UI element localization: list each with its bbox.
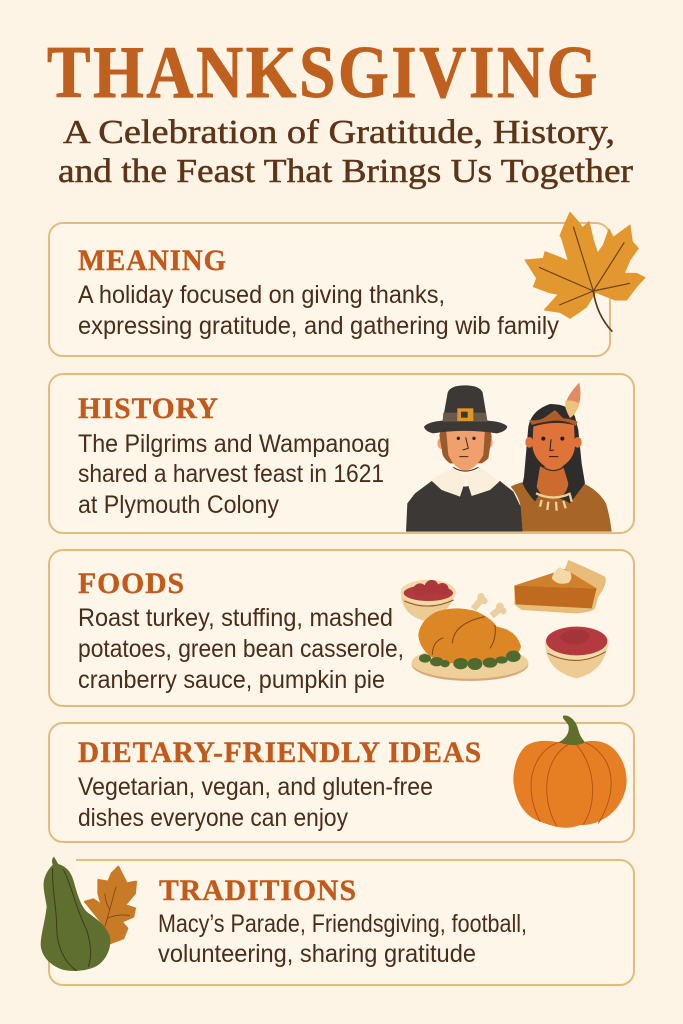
heading: traditions: TRADITIONS <box>159 874 357 907</box>
icon: cranberry bowl right <box>545 626 609 678</box>
icon: pumpkin <box>513 716 627 828</box>
icon: oak leaf <box>85 867 136 943</box>
text: meaning body: A holiday focused on giving thanks, <box>78 281 445 309</box>
text: traditions body: volunteering, sharing gratitude <box>158 940 476 968</box>
heading: dietary-friendly ideas: DIETARY-FRIENDLY IDEAS <box>78 736 482 769</box>
heading: foods: FOODS <box>78 567 185 600</box>
subtitle <box>58 114 634 190</box>
icon: cranberry bowl left <box>401 580 456 621</box>
subtitle: A Celebration of Gratitude, History, <box>63 114 615 151</box>
text: meaning body: expressing gratitude, and gathering wib family <box>78 312 559 340</box>
text: history body <box>78 430 390 519</box>
text: history body: at Plymouth Colony <box>78 491 279 519</box>
icon: green gourd <box>41 857 110 971</box>
text: dietary body <box>78 773 433 832</box>
panel: traditions <box>41 857 634 985</box>
illustration: Wampanoag figure <box>511 383 612 532</box>
panel: dietary-friendly ideas <box>49 716 634 842</box>
icon: maple leaf <box>525 212 645 332</box>
text: history body: The Pilgrims and Wampanoag <box>78 430 390 458</box>
text: history body: shared a harvest feast in 1621 <box>78 460 384 488</box>
text: meaning body <box>78 281 559 340</box>
icon: roast turkey on platter <box>412 593 528 681</box>
panel: meaning <box>49 212 645 356</box>
illustration: Pilgrim figure <box>406 385 523 532</box>
heading: meaning: MEANING <box>78 244 227 277</box>
icon: pumpkin pie slice <box>514 560 606 613</box>
text: foods body: potatoes, green bean casserole, <box>78 635 404 663</box>
text: foods body <box>78 604 404 694</box>
panel: foods <box>49 550 634 706</box>
title: THANKSGIVING <box>47 32 600 114</box>
text: traditions body <box>158 910 527 968</box>
heading: history: HISTORY <box>78 392 219 425</box>
text: dietary body: dishes everyone can enjoy <box>78 804 348 832</box>
panel: history <box>49 374 634 533</box>
text: dietary body: Vegetarian, vegan, and gluten-free <box>78 773 433 801</box>
text: foods body: cranberry sauce, pumpkin pie <box>78 666 385 694</box>
text: foods body: Roast turkey, stuffing, mashed <box>78 604 393 632</box>
text: traditions body: Macy’s Parade, Friendsgiving, football, <box>158 910 527 938</box>
subtitle: and the Feast That Brings Us Together <box>58 153 634 190</box>
